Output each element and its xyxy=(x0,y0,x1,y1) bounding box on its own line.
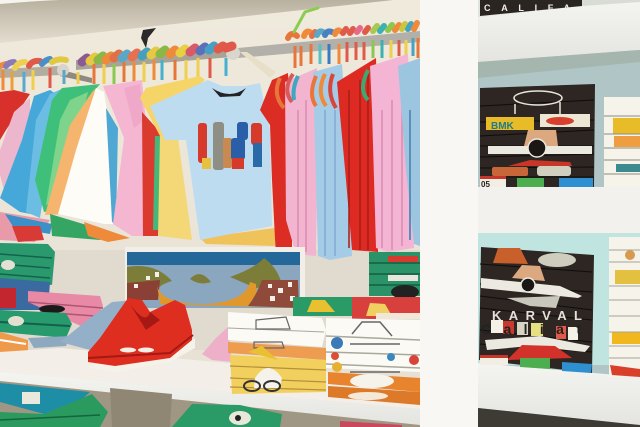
shelf board xyxy=(0,348,420,427)
light blue t-shirt with superhero print xyxy=(150,80,272,240)
top shelf shirt edge xyxy=(480,0,640,16)
pink bib xyxy=(202,327,232,362)
black t-shirt stack, upper xyxy=(480,84,595,189)
folded shirt stack, white orange yellow xyxy=(228,312,326,394)
back wall and ceiling xyxy=(0,0,420,427)
white t-shirt stack, upper right xyxy=(604,97,640,187)
hanger hooks, left xyxy=(0,59,66,68)
hanger hooks, right with green tag xyxy=(288,8,417,38)
black t-shirt stack, upper: 05 xyxy=(481,180,490,189)
hanger stems xyxy=(3,38,418,92)
black t-shirt stack, lower: KARVAL xyxy=(492,308,582,323)
right shelf unit xyxy=(478,0,640,427)
top shelf shirt edge: CALIFA xyxy=(484,3,570,13)
ransom-letter shirt print: Caliat xyxy=(481,321,581,337)
superhero group print xyxy=(198,122,262,170)
clothes rails xyxy=(0,31,420,83)
hanger hooks, middle xyxy=(82,46,232,62)
white t-shirt stack, lower right xyxy=(609,237,640,377)
hanging clothes, left group xyxy=(0,76,275,246)
folded shirt stack, white and orange xyxy=(326,318,420,405)
artwork poster on wall xyxy=(125,247,305,308)
upper right stack on wall xyxy=(293,252,420,319)
grey-blue bib xyxy=(60,300,135,350)
hanging clothes, right group xyxy=(260,54,420,260)
white pillar xyxy=(420,0,478,427)
black t-shirt stack, lower xyxy=(479,247,594,373)
left folded stacks xyxy=(0,243,103,360)
black t-shirt stack, upper: BMK xyxy=(491,121,515,132)
red bib stack xyxy=(88,298,195,372)
lower folded stacks below shelf xyxy=(0,383,402,427)
